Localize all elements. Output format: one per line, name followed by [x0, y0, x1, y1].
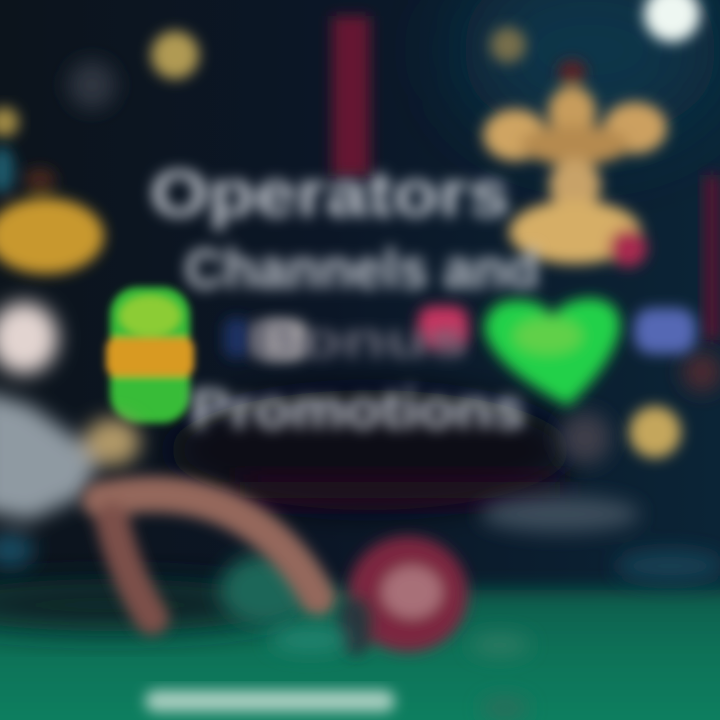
gold ornament left — [0, 146, 104, 274]
middle row tiles — [224, 306, 468, 360]
bokeh lights — [0, 27, 720, 464]
bottom white card — [145, 690, 395, 712]
player sleeve — [0, 302, 140, 568]
green and orange stacked icon — [106, 287, 194, 423]
headline text: Bonus — [248, 312, 468, 368]
moon light — [644, 0, 700, 42]
red hanging banner — [332, 16, 370, 176]
player hand and arm — [100, 494, 318, 618]
blue badge — [634, 308, 696, 354]
gold ornament right — [483, 60, 667, 267]
headline text: Promotions — [190, 377, 526, 440]
distant chips on right — [480, 496, 720, 582]
right red banner — [704, 175, 720, 340]
green table — [0, 554, 720, 720]
table highlights — [270, 628, 530, 718]
green heart icon — [484, 298, 620, 406]
headline text — [150, 156, 540, 440]
headline text: Channels and — [184, 237, 540, 300]
red poker chip — [338, 536, 468, 655]
headline text: Operators — [150, 156, 510, 230]
